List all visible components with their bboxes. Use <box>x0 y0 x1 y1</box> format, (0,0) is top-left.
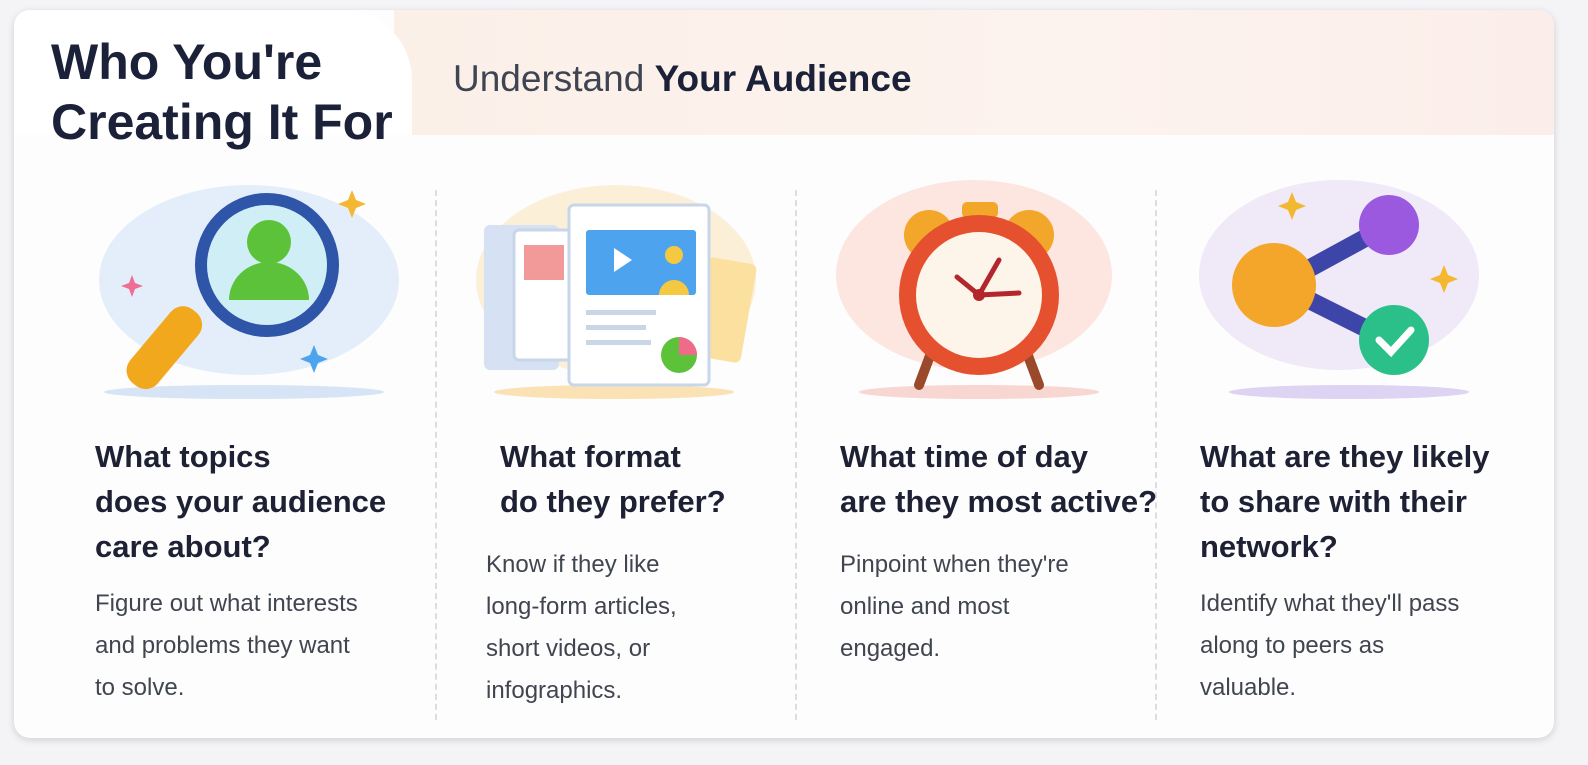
body 2: short videos, or <box>486 635 650 662</box>
heading 4: What are they likely <box>1200 439 1489 474</box>
heading 3: are they most active? <box>840 484 1157 519</box>
heading 2: What format <box>500 439 681 474</box>
body 3: online and most <box>840 593 1009 620</box>
title: Who You're <box>51 34 322 90</box>
body 4: Identify what they'll pass <box>1200 590 1459 617</box>
body 3 <box>840 551 1069 662</box>
body 1: and problems they want <box>95 632 350 659</box>
body 4 <box>1200 590 1459 701</box>
body 1: Figure out what interests <box>95 590 358 617</box>
body 2: long-form articles, <box>486 593 677 620</box>
heading 1: does your audience <box>95 484 386 519</box>
heading 3 <box>840 439 1157 519</box>
heading 3: What time of day <box>840 439 1088 474</box>
subtitle: Understand Your Audience <box>453 58 912 99</box>
heading 1: care about? <box>95 529 271 564</box>
heading 4: to share with their <box>1200 484 1467 519</box>
heading 1 <box>95 439 386 564</box>
column 2 text <box>486 439 726 704</box>
heading 1: What topics <box>95 439 271 474</box>
heading 4: network? <box>1200 529 1338 564</box>
heading 4 <box>1200 439 1490 564</box>
icon: share network <box>1199 180 1479 399</box>
column 3 text <box>840 439 1157 662</box>
body 4: valuable. <box>1200 674 1296 701</box>
column 4 text <box>1200 439 1490 701</box>
body 2: infographics. <box>486 677 622 704</box>
heading 2 <box>500 439 726 519</box>
body 1: to solve. <box>95 674 184 701</box>
icon: documents <box>476 185 756 399</box>
body 4: along to peers as <box>1200 632 1384 659</box>
body 3: engaged. <box>840 635 940 662</box>
body 2 <box>486 551 677 704</box>
column 1 text <box>95 439 386 701</box>
body 3: Pinpoint when they're <box>840 551 1069 578</box>
body 1 <box>95 590 358 701</box>
icon: alarm clock <box>836 180 1112 399</box>
icon: magnifier <box>99 185 399 399</box>
title <box>51 34 393 150</box>
heading 2: do they prefer? <box>500 484 726 519</box>
body 2: Know if they like <box>486 551 659 578</box>
title: Creating It For <box>51 94 393 150</box>
